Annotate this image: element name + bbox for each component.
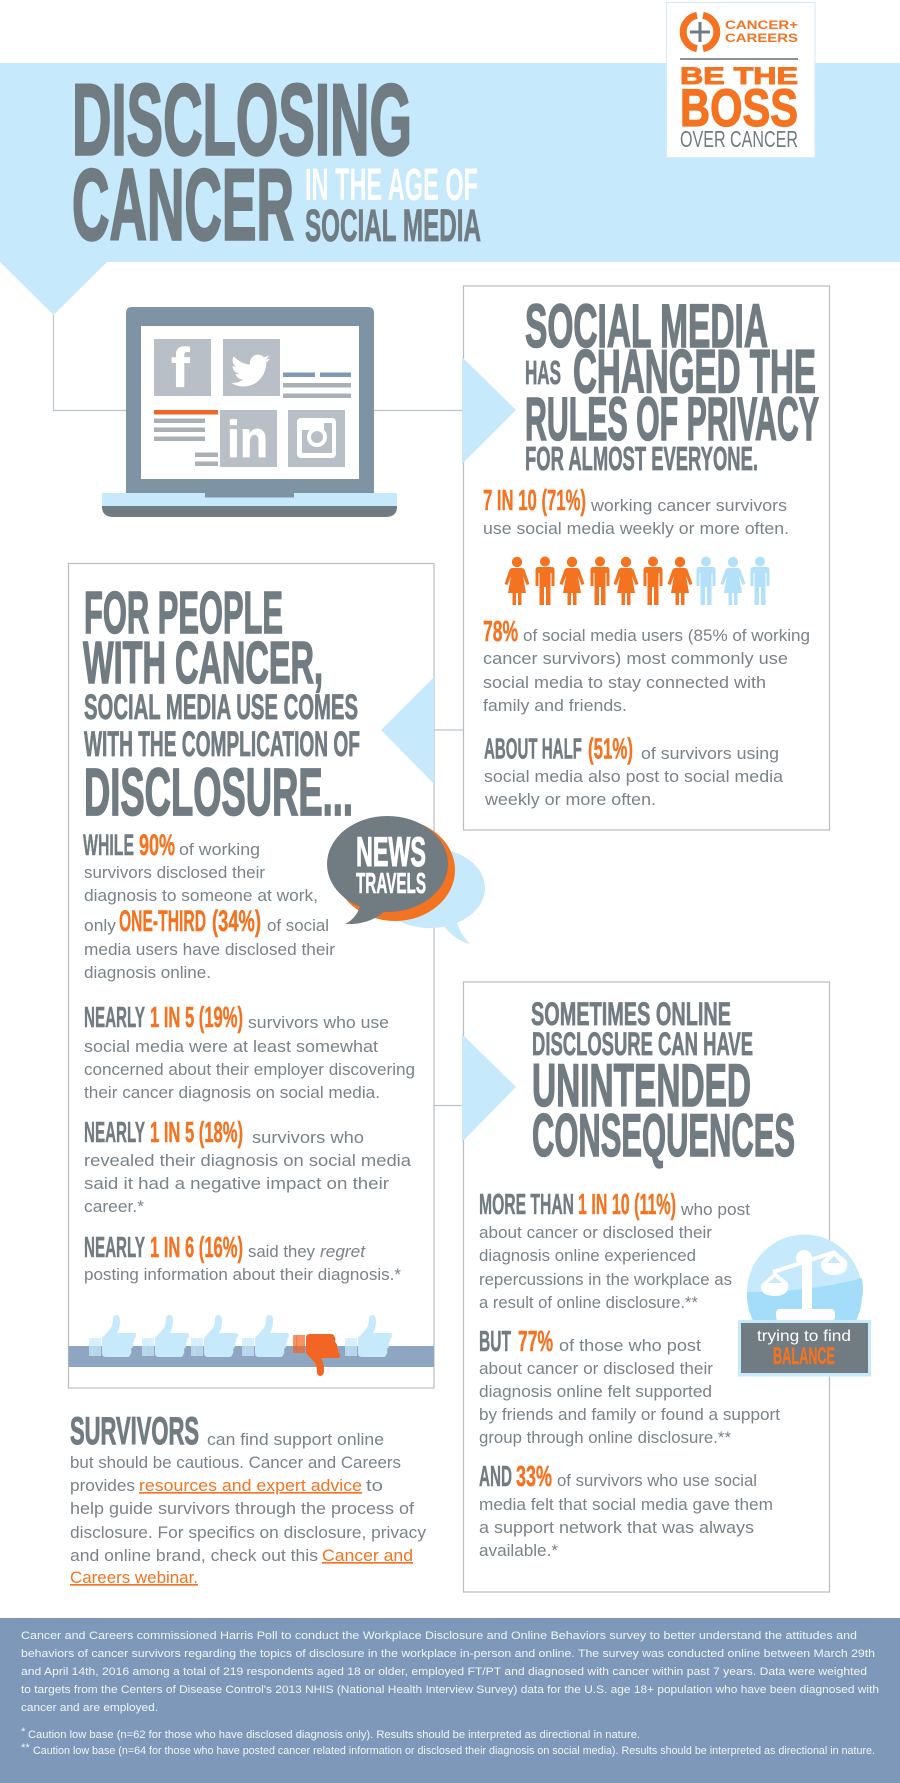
text: nearly 1 in 6 (16%): posting information about their diagnosis.* xyxy=(84,1266,402,1284)
heading: social media has changed the rules of privacy: HAS xyxy=(525,354,561,391)
heading: unintended consequences xyxy=(531,996,795,1169)
text: while 90%: survivors disclosed their xyxy=(84,864,266,882)
speech bubbles: news travels xyxy=(327,816,485,944)
text: 7 in 10 xyxy=(483,485,789,538)
text: but 77%: BUT xyxy=(479,1326,511,1358)
text: nearly 1 in 6 (16%): regret xyxy=(320,1243,366,1261)
text: 78%: family and friends. xyxy=(483,697,627,715)
text: more than 1 in 10: MORE THAN xyxy=(479,1189,574,1221)
footer: survey methodology: Caution low base (n=64 for those who have posted cancer related information or disclosed their diagnosis on social media). Results should be interpreted as directional in nature. xyxy=(33,1745,875,1757)
text: 7 in 10: 7 IN 10 (71%) xyxy=(483,485,586,517)
icon: LinkedIn tile: in xyxy=(227,411,268,469)
text: about half: (51%) xyxy=(588,734,633,766)
text: nearly 1 in 6 (16%): said they xyxy=(248,1243,316,1261)
heading: for people with cancer: FOR PEOPLE xyxy=(84,580,283,646)
text: nearly 1 in 5 (18%): NEARLY xyxy=(84,1117,145,1149)
text: more than 1 in 10: who post xyxy=(680,1201,750,1219)
text: more than 1 in 10: a result of online disclosure.** xyxy=(479,1294,699,1312)
footer: survey methodology: behaviors of cancer survivors regarding the topics of disclosure in the workplace in-person and online. The survey was conducted online between March 29th xyxy=(21,1648,875,1660)
footer: survey methodology: Caution low base (n=62 for those who have disclosed diagnosis only). Results should be interpreted as directional in nature. xyxy=(28,1729,640,1741)
text: but 77%: group through online disclosure.** xyxy=(479,1429,732,1447)
text: nearly 1 in 5 (19%): concerned about their employer discovering xyxy=(84,1061,415,1079)
text: but 77%: 77% xyxy=(518,1326,553,1358)
footer: survey methodology: ** xyxy=(21,1742,30,1754)
text: and 33%: a support network that was always xyxy=(479,1519,754,1537)
logo: Cancer and Careers xyxy=(666,2,815,158)
text: nearly 1 in 5 (19%): 1 IN 5 (19%) xyxy=(150,1002,243,1034)
text: nearly 1 in 5 (18%): 1 IN 5 (18%) xyxy=(150,1117,243,1149)
title: CANCER xyxy=(72,150,294,262)
icon row: thumbs up and thumbs down on bar xyxy=(68,1315,434,1376)
footer: survey methodology: and April 14th, 2016 among a total of 219 respondents aged 18 or older, employed FT/PT and diagnosed with cancer within past 7 years. Data were weighted xyxy=(21,1666,867,1678)
title: DISCLOSING xyxy=(72,64,412,176)
heading: for people with cancer: SOCIAL MEDIA USE COMES xyxy=(84,688,358,727)
logo: Cancer and Careers: OVER CANCER xyxy=(680,126,798,152)
text: survivors call to action: Careers webinar. xyxy=(70,1569,198,1587)
text: and 33%: 33% xyxy=(516,1461,552,1493)
text: nearly 1 in 5 (19%): their cancer diagnosis on social media. xyxy=(84,1084,380,1102)
footer: survey methodology: cancer and are employed. xyxy=(21,1702,158,1714)
text: more than 1 in 10: diagnosis online experienced xyxy=(479,1247,696,1265)
text: more than 1 in 10: 1 IN 10 (11%) xyxy=(578,1189,676,1221)
text: about half: social media also post to social media xyxy=(484,768,784,786)
text: survivors call to action: can find support online xyxy=(207,1431,384,1449)
speech bubbles: news travels: TRAVELS xyxy=(356,868,426,900)
heading: social media has changed the rules of privacy xyxy=(525,292,819,477)
text: survivors call to action: disclosure. For specifics on disclosure, privacy xyxy=(70,1524,427,1542)
heading: for people with cancer: WITH THE COMPLICATION OF xyxy=(84,725,360,764)
footer: survey methodology: Cancer and Careers commissioned Harris Poll to conduct the Workplace Disclosure and Online Behaviors survey to better understand the attitudes and xyxy=(21,1630,857,1642)
pictogram: 7 of 10 people xyxy=(504,556,770,605)
text: nearly 1 in 6 (16%): 1 IN 6 (16%) xyxy=(150,1232,243,1264)
text: while 90%: only xyxy=(84,917,117,935)
arrow: pointer out of panel xyxy=(381,677,434,784)
text: and 33%: AND xyxy=(479,1461,512,1493)
text: 78% xyxy=(483,616,810,715)
text: nearly 1 in 5 (18%): said it had a negative impact on their xyxy=(84,1175,390,1193)
panel: social media has changed the rules xyxy=(462,286,830,830)
text: nearly 1 in 6 (16%): NEARLY xyxy=(84,1232,145,1264)
text: but 77%: by friends and family or found a support xyxy=(479,1406,780,1424)
icon: Facebook tile xyxy=(154,336,211,399)
text: survivors call to action: Cancer and xyxy=(322,1547,413,1565)
text: nearly 1 in 5 (19%): NEARLY xyxy=(84,1002,145,1034)
text: more than 1 in 10: about cancer or disclosed their xyxy=(479,1224,713,1242)
icon: Instagram tile xyxy=(288,410,345,467)
logo: Cancer and Careers: CAREERS xyxy=(725,31,798,45)
text: about half: weekly or more often. xyxy=(484,791,656,809)
text: survivors call to action xyxy=(70,1410,427,1587)
title: SOCIAL MEDIA xyxy=(305,200,481,251)
text: nearly 1 in 6 (16%) xyxy=(84,1232,402,1284)
panel: unintended consequences xyxy=(462,982,830,1592)
text: but 77% xyxy=(479,1326,780,1447)
icon: balance scale with caption: trying to find xyxy=(757,1328,851,1345)
text: survivors call to action: to xyxy=(366,1477,383,1495)
heading: for people with cancer: DISCLOSURE... xyxy=(84,755,353,830)
text: while 90%: media users have disclosed their xyxy=(84,941,336,959)
title: IN THE AGE OF xyxy=(305,159,478,210)
panel: for people with cancer xyxy=(68,564,434,1388)
text: while 90%: 90% xyxy=(139,829,175,862)
text: while 90%: of working xyxy=(179,841,260,859)
text: nearly 1 in 5 (19%): survivors who use xyxy=(248,1014,389,1032)
text: nearly 1 in 5 (18%): survivors who xyxy=(252,1129,364,1147)
text: 7 in 10: use social media weekly or more often. xyxy=(483,520,789,538)
icon: balance scale with caption xyxy=(738,1234,871,1376)
text: while 90%: (34%) xyxy=(212,905,261,938)
text: while 90%: diagnosis to someone at work, xyxy=(84,887,318,905)
text: nearly 1 in 5 (18%) xyxy=(84,1117,412,1216)
text: more than 1 in 10 xyxy=(479,1189,750,1312)
text: survivors call to action: and online brand, check out this xyxy=(70,1547,318,1565)
footer: survey methodology: * xyxy=(21,1726,26,1738)
icon: laptop with social media tiles xyxy=(102,307,397,517)
text: more than 1 in 10: repercussions in the workplace as xyxy=(479,1271,732,1289)
icon: Facebook tile: f xyxy=(171,336,190,399)
text: while 90%: WHILE xyxy=(83,829,134,862)
text: survivors call to action: but should be cautious. Cancer and Careers xyxy=(70,1454,401,1472)
icon: balance scale with caption: BALANCE xyxy=(773,1343,835,1370)
text: and 33%: of survivors who use social xyxy=(557,1472,757,1490)
text: and 33% xyxy=(479,1461,773,1560)
text lines beside Twitter tile xyxy=(283,372,351,398)
text: but 77%: diagnosis online felt supported xyxy=(479,1383,712,1401)
icon: Twitter tile xyxy=(223,339,280,396)
text: nearly 1 in 5 (19%): social media were at least somewhat xyxy=(84,1038,378,1056)
arrow: pointer into panel xyxy=(462,1034,516,1142)
header banner xyxy=(0,63,900,315)
logo: Cancer and Careers: CANCER+ xyxy=(725,18,798,32)
text: but 77%: of those who post xyxy=(559,1337,701,1355)
footer: survey methodology: to targets from the Centers of Disease Control's 2013 NHIS (National Health Interview Survey) data for the U.S. age 18+ population who have been diagnosed with xyxy=(21,1684,879,1696)
text lines beside LinkedIn tile xyxy=(154,410,218,466)
heading: for people with cancer: WITH CANCER, xyxy=(83,630,323,696)
connector from banner to laptop and panel xyxy=(54,315,463,410)
text: while 90%: of social xyxy=(267,917,329,935)
arrow: pointer into panel xyxy=(462,357,516,464)
text: 78%: social media to stay connected with xyxy=(483,674,766,692)
logo: Cancer and Careers: BE THE xyxy=(680,63,798,90)
text: while 90%: ONE-THIRD xyxy=(119,905,206,938)
text: while 90% xyxy=(83,829,336,982)
text: 7 in 10: working cancer survivors xyxy=(590,497,787,515)
text: about half: of survivors using xyxy=(641,745,779,763)
text: about half: ABOUT HALF xyxy=(484,734,582,766)
title xyxy=(72,64,481,262)
speech bubbles: news travels: NEWS xyxy=(356,828,426,875)
text: survivors call to action: SURVIVORS xyxy=(70,1410,199,1453)
text: 78%: of social media users (85% of working xyxy=(523,627,810,645)
text: 78%: 78% xyxy=(483,616,518,648)
heading: unintended consequences: SOMETIMES ONLINE xyxy=(531,996,731,1032)
text: nearly 1 in 5 (19%) xyxy=(84,1002,415,1102)
text: and 33%: media felt that social media gave them xyxy=(479,1496,773,1514)
logo: Cancer and Careers: BOSS xyxy=(680,79,798,138)
text: 78%: cancer survivors) most commonly use xyxy=(483,650,788,668)
text: survivors call to action: help guide survivors through the process of xyxy=(70,1500,414,1518)
text: survivors call to action: provides xyxy=(70,1477,135,1495)
text: about half xyxy=(484,734,784,809)
text: and 33%: available.* xyxy=(479,1542,559,1560)
footer: survey methodology xyxy=(0,1618,900,1783)
text: survivors call to action: resources and expert advice xyxy=(139,1477,362,1495)
connectors between panels xyxy=(434,730,463,1106)
heading: for people with cancer xyxy=(83,580,360,830)
text: while 90%: diagnosis online. xyxy=(84,964,211,982)
text: but 77%: about cancer or disclosed their xyxy=(479,1360,714,1378)
text: nearly 1 in 5 (18%): revealed their diagnosis on social media xyxy=(84,1152,412,1170)
text: nearly 1 in 5 (18%): career.* xyxy=(84,1198,145,1216)
